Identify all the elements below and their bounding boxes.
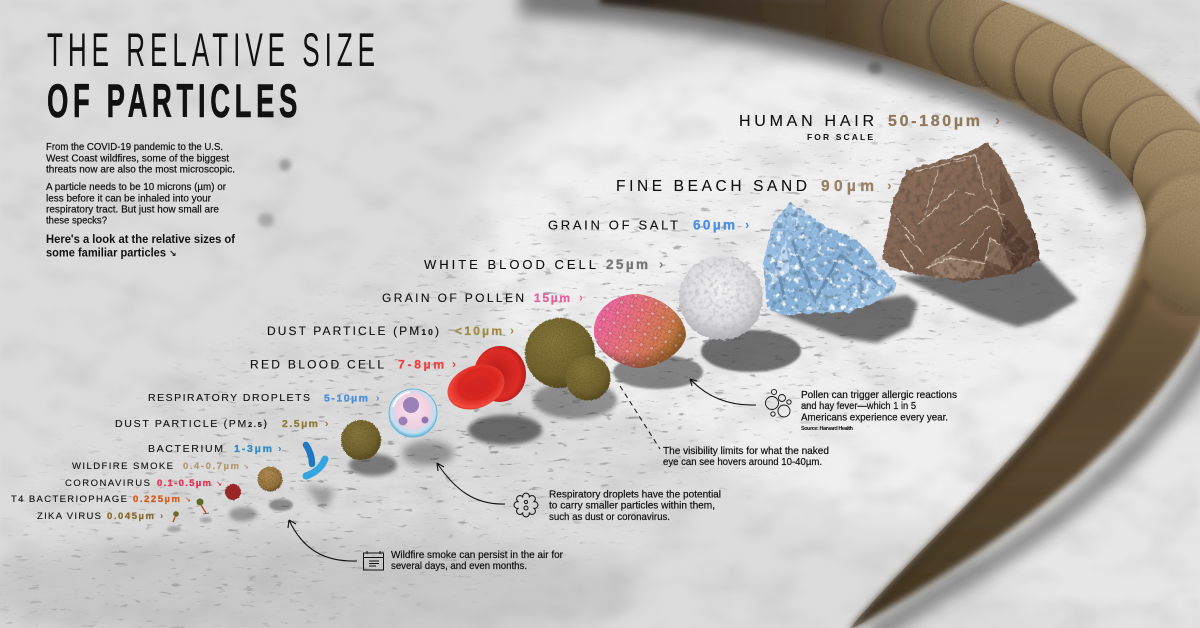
label: dust particle PM2.5: ›: [325, 418, 329, 430]
label: red blood cell: [250, 357, 456, 372]
particle: Zika virus: [173, 511, 179, 522]
label: human hair: HUMAN HAIR: [739, 113, 874, 130]
particle: grain of pollen: [594, 294, 686, 368]
particle: dust particle PM2.5: [341, 420, 381, 460]
label: Zika virus: 0.045µm: [107, 511, 154, 522]
label: white blood cell: [424, 256, 663, 272]
shadow cast by human hair: [520, 0, 1200, 628]
intro text block: these specks?: [46, 216, 107, 226]
label: bacterium: ›: [278, 442, 282, 454]
label: white blood cell: WHITE BLOOD CELL: [424, 257, 596, 272]
label: red blood cell: RED BLOOD CELL: [250, 358, 384, 372]
particle: white blood cell: [679, 256, 763, 340]
particle: coronavirus: [225, 484, 241, 500]
title: OF PARTICLES: [47, 75, 302, 128]
label: dust particle PM10: [267, 324, 514, 338]
label: fine beach sand: [616, 177, 892, 195]
label: respiratory droplets: 5-10µm: [324, 392, 368, 404]
label: T4 bacteriophage: 0.225µm: [133, 494, 180, 505]
callout: respiratory droplets: [437, 463, 721, 523]
callout: wildfire smoke: several days, and even months.: [391, 561, 527, 572]
callout: pollen allergies: [690, 379, 957, 432]
intro text block: less before it can be inhaled into your: [46, 194, 212, 204]
label: coronavirus: 0.1-0.5µm: [157, 478, 211, 489]
callout: pollen allergies: Pollen can trigger allergic reactions: [801, 390, 957, 401]
label: grain of pollen: [382, 290, 583, 305]
human hair strand: [600, 0, 1200, 628]
intro text block: some familiar particles: [46, 248, 166, 260]
label: grain of pollen: GRAIN OF POLLEN: [382, 291, 524, 305]
particle: T4 bacteriophage: [196, 498, 209, 514]
label: human hair: FOR SCALE: [807, 132, 873, 142]
label: T4 bacteriophage: [11, 494, 191, 505]
label: bacterium: [148, 442, 282, 455]
label: coronavirus: ↘: [216, 481, 222, 488]
callout: visibility limit: [620, 386, 829, 468]
label: bacterium: BACTERIUM: [148, 443, 223, 455]
label: coronavirus: CORONAVIRUS: [65, 478, 150, 489]
intro text block: Here's a look at the relative sizes of: [46, 234, 235, 246]
label: red blood cell: 7-8µm: [398, 358, 444, 372]
label: dust particle PM10: ›: [510, 324, 514, 338]
callout: pollen allergies: Source: Harvard Health: [801, 426, 854, 432]
callout: respiratory droplets: Respiratory droplets have the potential: [549, 490, 721, 500]
label: Zika virus: [37, 510, 163, 522]
icon: pollen bubbles: [766, 389, 791, 417]
label: grain of salt: [548, 217, 749, 232]
particle: bacterium: [306, 445, 325, 476]
intro text block: respiratory tract. But just how small are: [46, 204, 219, 216]
label: red blood cell: ›: [452, 357, 456, 371]
label: grain of salt: ›: [745, 217, 749, 232]
intro text block: threats now are also the most microscopic.: [46, 164, 235, 176]
particle: respiratory droplet: [389, 389, 437, 437]
label: wildfire smoke: [72, 461, 249, 472]
particle: dust particle PM10: [525, 318, 610, 400]
label: Zika virus: ›: [160, 510, 163, 522]
intro text block: [46, 142, 235, 260]
label: coronavirus: [65, 478, 222, 489]
dashed line: [620, 386, 660, 449]
arrow to smoke: [288, 520, 357, 561]
label: wildfire smoke: ↘: [243, 464, 249, 471]
label: white blood cell: 25µm: [606, 257, 648, 272]
label: human hair: ›: [995, 112, 1000, 129]
label: dust particle PM2.5: [115, 418, 329, 430]
label: bacterium: 1-3µm: [234, 443, 272, 455]
label: dust particle PM10: <10µm: [455, 324, 502, 338]
label: dust particle PM10: DUST PARTICLE (PM10): [267, 324, 439, 338]
callout: visibility limit: The visibility limits for what the naked: [663, 446, 829, 457]
arrow to droplet: [437, 463, 505, 504]
particle: red blood cells: [441, 346, 526, 418]
callout: wildfire smoke: [288, 520, 564, 572]
label: fine beach sand: ›: [887, 177, 892, 193]
label: human hair: [739, 112, 1000, 142]
particle: wildfire smoke: [258, 466, 282, 492]
callout: pollen allergies: Americans experience every year.: [801, 412, 948, 424]
shadows under particles: [167, 260, 1078, 532]
label: dust particle PM2.5: 2.5µm: [282, 418, 318, 430]
label: respiratory droplets: RESPIRATORY DROPLETS: [148, 392, 310, 404]
intro text block: From the COVID-19 pandemic to the U.S.: [46, 142, 223, 153]
label: respiratory droplets: ›: [376, 392, 380, 404]
callout: respiratory droplets: such as dust or coronavirus.: [549, 512, 670, 523]
callout: pollen allergies: and hay fever—which 1 in 5: [801, 401, 916, 412]
callout: respiratory droplets: to carry smaller particles within them,: [549, 500, 715, 512]
label: wildfire smoke: WILDFIRE SMOKE: [72, 461, 173, 472]
title: [47, 24, 380, 128]
label: grain of salt: GRAIN OF SALT: [548, 218, 678, 232]
intro text block: A particle needs to be 10 microns (µm) or: [46, 182, 227, 193]
label: grain of pollen: 15µm: [534, 291, 570, 305]
label: grain of pollen: ›: [579, 290, 583, 304]
particle: fine beach sand grain: [882, 142, 1040, 282]
label: T4 bacteriophage: T4 BACTERIOPHAGE: [11, 494, 127, 505]
icon: droplet with particles: [514, 493, 538, 517]
icon: calendar: [364, 551, 384, 570]
label: white blood cell: ›: [659, 256, 663, 272]
callout: wildfire smoke: Wildfire smoke can persist in the air for: [391, 550, 564, 561]
arrow to pollen: [690, 379, 756, 405]
label: T4 bacteriophage: ↘: [185, 497, 191, 504]
particle: grain of salt: [763, 203, 897, 315]
callout: visibility limit: eye can see hovers around 10-40µm.: [663, 457, 822, 468]
intro text block: ↘: [169, 248, 177, 258]
label: fine beach sand: FINE BEACH SAND: [616, 178, 807, 195]
title: THE RELATIVE SIZE: [47, 24, 380, 77]
label: Zika virus: ZIKA VIRUS: [37, 511, 101, 522]
label: grain of salt: 60µm: [693, 218, 735, 232]
label: wildfire smoke: 0.4-0.7µm: [183, 461, 239, 472]
label: dust particle PM2.5: DUST PARTICLE (PM2.5): [115, 418, 267, 430]
label: human hair: 50-180µm: [888, 113, 980, 130]
label: respiratory droplets: [148, 392, 380, 404]
label: fine beach sand: 90µm: [821, 178, 874, 195]
intro text block: West Coast wildfires, some of the biggest: [46, 154, 229, 164]
